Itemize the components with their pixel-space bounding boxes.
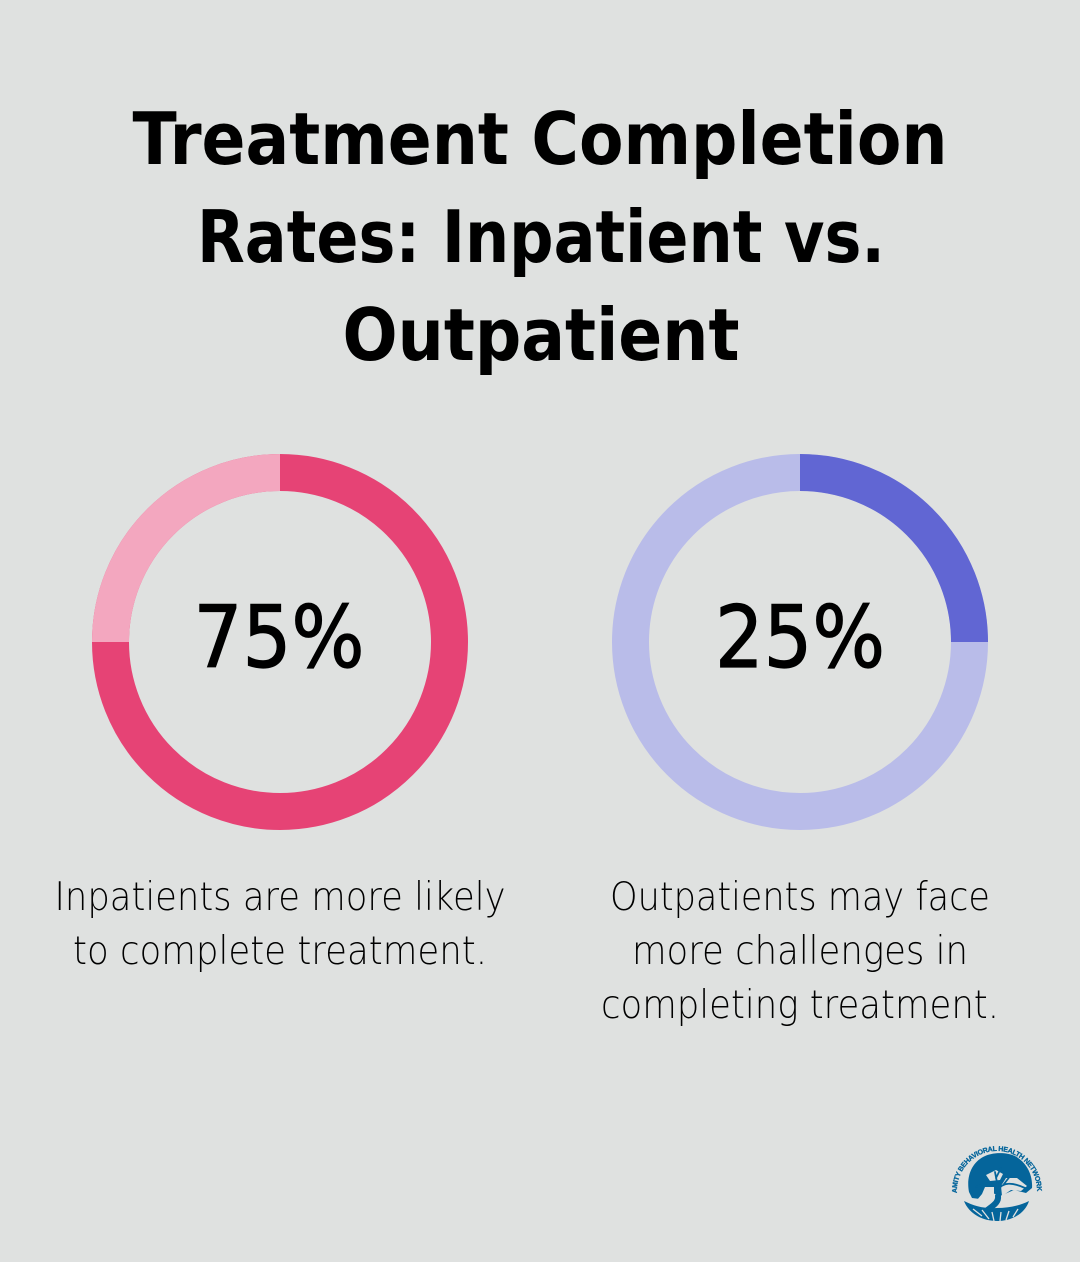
logo text: AMITY BEHAVIORAL HEALTH NETWORK <box>952 1146 1042 1194</box>
stat: 75%: 75% <box>194 588 364 688</box>
panel: inpatient <box>54 472 506 974</box>
caption: inpatient: Inpatients are more likely <box>54 875 506 920</box>
title <box>132 97 948 377</box>
title: Treatment Completion <box>132 97 948 181</box>
caption: outpatient: more challenges in <box>632 929 968 974</box>
root gaps <box>973 1209 1018 1221</box>
donut chart: 25% <box>630 472 970 812</box>
title: Rates: Inpatient vs. <box>197 195 885 279</box>
caption: outpatient: completing treatment. <box>601 983 999 1028</box>
tree roots <box>964 1201 1029 1221</box>
tree trunk and branches <box>976 1168 1025 1212</box>
canopy gaps <box>977 1170 1027 1203</box>
panel: outpatient <box>601 472 999 1028</box>
caption: inpatient: to complete treatment. <box>73 929 487 974</box>
caption: outpatient: Outpatients may face <box>610 875 990 920</box>
caption: inpatient <box>54 875 506 974</box>
caption: outpatient <box>601 875 999 1028</box>
donut chart: 75% <box>110 472 450 812</box>
icon: Amity Behavioral Health Network logo <box>952 1146 1042 1221</box>
tree canopy <box>968 1153 1032 1199</box>
stat: 25%: 25% <box>715 588 885 688</box>
title: Outpatient <box>342 293 740 377</box>
